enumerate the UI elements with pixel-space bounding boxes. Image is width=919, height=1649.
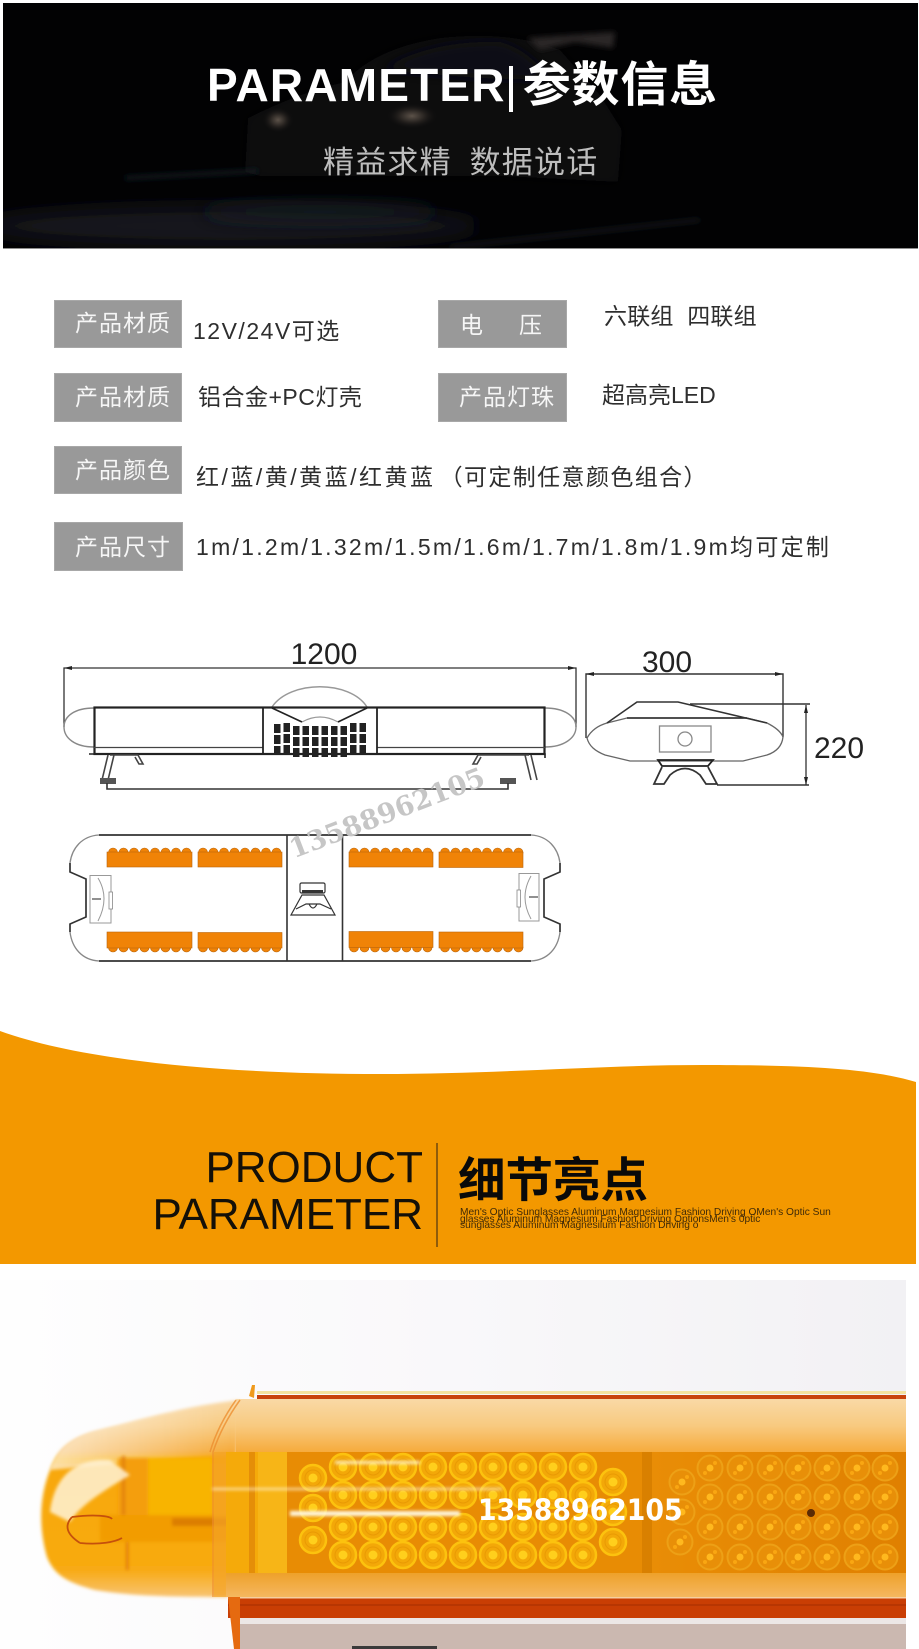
- image: dark car on night road: [3, 3, 918, 249]
- panel: dark header banner: [3, 3, 918, 249]
- drawing: top view with LED modules: [70, 835, 560, 961]
- row label: 产品尺寸: [54, 522, 183, 571]
- row label: 产品材质 second row: 产品材质: [75, 384, 171, 410]
- row label: 电压: 电 压: [460, 312, 542, 338]
- row label: 产品材质 second row: [54, 373, 182, 422]
- heading: PRODUCT PARAMETER: [152, 1143, 423, 1238]
- LED modules: orange bars: [107, 848, 523, 952]
- dimension label: 220: 220: [814, 732, 864, 765]
- small caption text: sunglasses Aluminum Magnesilum Fashion Driving o: [460, 1220, 698, 1231]
- panel: technical drawings: [63, 638, 864, 962]
- value: 超高亮LED: 超高亮LED: [602, 382, 716, 408]
- row label: 产品材质: 产品材质: [75, 310, 171, 336]
- phone number overlay: 13588962105: [478, 1493, 683, 1527]
- LED panel background: [226, 1452, 906, 1573]
- small caption text: glasses Aluminum Magnesium Fashion Driving OptionsMen's 0ptic: [460, 1214, 760, 1225]
- subtitle: 精益求精 数据说话: 精益求精 数据说话: [323, 145, 598, 180]
- small caption text: [460, 1207, 831, 1231]
- row label: 产品材质: [54, 300, 182, 348]
- row label: 产品颜色: 产品颜色: [75, 457, 171, 483]
- dimension label: 300: 300: [642, 646, 692, 679]
- row label: 电压: [438, 300, 567, 348]
- drawing: front view 1200: [64, 638, 576, 789]
- small caption text: Men's Optic Sunglasses Aluminum Magnesium Fashion Driving OMen's Optic Sun: [460, 1207, 831, 1218]
- row label: 产品尺寸: 产品尺寸: [75, 534, 171, 560]
- heading: PARAMETER 参数信息: PARAMETER 参数信息: [207, 59, 718, 112]
- value: 铝合金+PC灯壳: 铝合金+PC灯壳: [198, 384, 362, 410]
- lower translucent band: [226, 1573, 906, 1597]
- lamp end cap: [41, 1399, 240, 1597]
- top rim strips: [249, 1385, 906, 1399]
- panel: orange section banner: [0, 1031, 916, 1264]
- value: size options: 1m/1.2m/1.32m/1.5m/1.6m/1.7m/1.8m/1.9m均可定制: [196, 534, 831, 560]
- panel: parameter table: [54, 300, 831, 571]
- red lower band: [228, 1597, 906, 1649]
- row label: 产品颜色: [54, 446, 182, 494]
- heading: 细节亮点: 细节亮点: [458, 1155, 648, 1208]
- LED array: bright block: [300, 1454, 626, 1568]
- watermark: phone number over drawing: 13588962105: [285, 762, 489, 865]
- value: colour options: 红/蓝/黄/黄蓝/红黄蓝（可定制任意颜色组合）: [196, 464, 708, 490]
- row label: 产品灯珠: 产品灯珠: [459, 384, 555, 410]
- shape: wavy orange background: [0, 1031, 916, 1264]
- value: 12V/24V可选: 12V/24V可选: [193, 318, 341, 344]
- icon: centre siren: [291, 883, 335, 915]
- row label: 产品灯珠: [438, 373, 567, 422]
- LED array: dim block: [668, 1456, 898, 1570]
- silver base: [240, 1618, 906, 1649]
- dimension label: 1200: 1200: [291, 638, 357, 671]
- glare highlights: [212, 1461, 502, 1516]
- heading: PRODUCT PARAMETER: PRODUCT: [205, 1143, 423, 1192]
- image: amber LED light bar close-up: [38, 1280, 906, 1649]
- heading: PRODUCT PARAMETER: PARAMETER: [152, 1190, 423, 1238]
- upper translucent band: [236, 1399, 906, 1452]
- divider: [436, 1143, 438, 1247]
- drawing: side view 300 x 220: [586, 646, 864, 785]
- value: 六联组 四联组: 六联组 四联组: [604, 303, 757, 329]
